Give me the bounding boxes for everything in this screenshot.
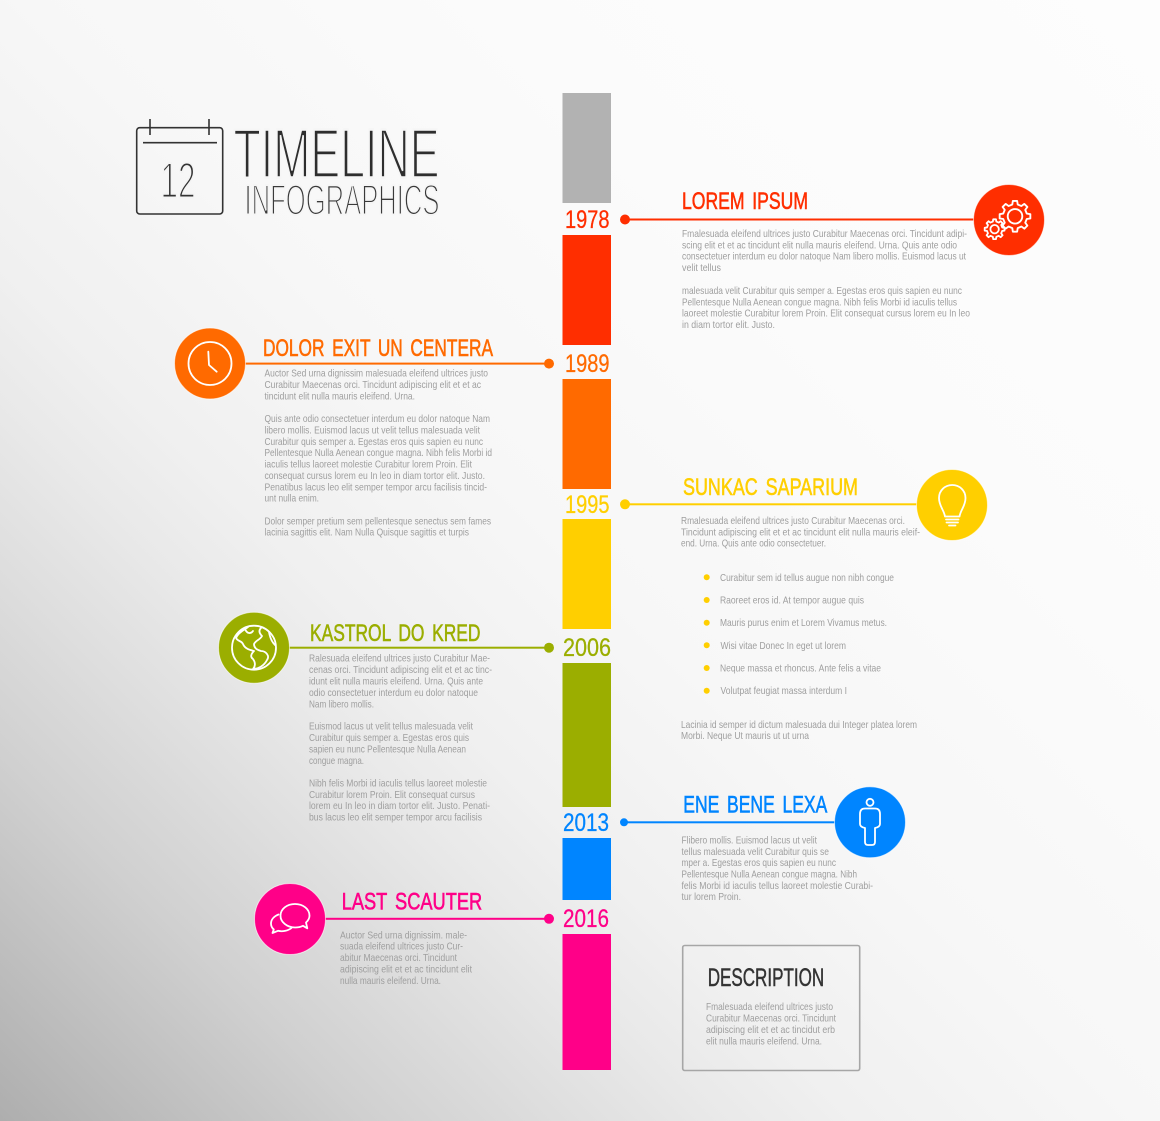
body text: Tincidunt adipiscing elit et et ac tincidunt elit nulla mauris eleif- xyxy=(681,526,920,538)
body text: consectetuer interdum eu dolor natoque Nam libero mollis. Euismod lacus ut xyxy=(682,251,966,263)
bullet list: Volutpat feugiat massa interdum I xyxy=(720,685,847,697)
icon: person xyxy=(834,787,906,858)
description text: elit nulla mauris eleifend. Urna. xyxy=(706,1036,822,1048)
icon: calendar xyxy=(137,119,223,214)
body text: Curabitur quis semper a. Egestas eros quis xyxy=(309,732,469,744)
bullet list xyxy=(704,572,894,697)
bullet list: Mauris purus enim et Lorem Vivamus metus. xyxy=(720,617,887,629)
body text: Dolor semper pretium sem pellentesque senectus sem fames xyxy=(264,515,491,527)
bullet list: Neque massa et rhoncus. Ante felis a vitae xyxy=(720,662,881,674)
body text: Penatibus lacus leo elit semper tempor arcu facilisis tincid- xyxy=(264,481,487,493)
body text: Flibero mollis. Euismod lacus ut velit xyxy=(682,834,817,846)
body text: end. Urna. Quis ante odio consectetuer. xyxy=(681,538,826,550)
panel: 1978 lorem ipsum xyxy=(565,184,1044,331)
body text: idunt elit nulla mauris eleifend. Urna. Quis ante xyxy=(309,676,483,688)
body text: Rmalesuada eleifend ultrices justo Curabitur Maecenas orci. xyxy=(681,515,905,527)
icon: clock xyxy=(174,328,246,399)
body text: tellus malesuada velit Curabitur quis se xyxy=(682,846,829,858)
body text: bus lacus leo elit semper tempor arcu facilisis xyxy=(309,812,482,824)
body text: libero mollis. Euismod lacus ut velit tellus malesuada velit xyxy=(264,424,480,436)
connector line xyxy=(620,818,839,826)
icon: globe xyxy=(218,612,290,683)
header: timeline infographics logo xyxy=(137,114,439,224)
body text xyxy=(340,930,472,987)
body text: sapien eu nunc Pellentesque Nulla Aenean xyxy=(309,744,466,756)
body text: cenas orci. Tincidunt adipiscing elit et et ac tinc- xyxy=(309,664,492,676)
year 1989: 1989 xyxy=(565,350,610,378)
body text xyxy=(681,515,920,550)
body text: lorem eu In leo in diam tortor elit. Justo. Penati- xyxy=(309,800,490,812)
body text: Auctor Sed urna dignissim. male- xyxy=(340,930,467,942)
body text: Pellentesque Nulla Aenean congue magna. Nibh felis Morbi id iaculis tellus xyxy=(682,296,957,308)
body text: Curabitur quis semper a. Egestas eros quis sapien eu nunc xyxy=(264,436,483,448)
body text xyxy=(309,652,492,824)
body text: malesuada velit Curabitur quis semper a. Egestas eros quis sapien eu nunc xyxy=(682,285,962,297)
heading: LOREM IPSUM xyxy=(682,188,808,215)
panel: 2016 last scauter xyxy=(254,884,609,987)
closing text: Lacinia id semper id dictum malesuada dui Integer platea lorem xyxy=(681,719,917,731)
heading: LAST SCAUTER xyxy=(342,888,482,915)
bullet list: Curabitur sem id tellus augue non nibh congue xyxy=(720,572,894,584)
panel: 2013 ene bene lexa xyxy=(563,787,906,903)
body text: Fmalesuada eleifend ultrices justo Curabitur Maecenas orci. Tincidunt adipi- xyxy=(682,228,967,240)
description text: Fmalesuada eleifend ultrices justo xyxy=(706,1001,833,1013)
body text: scing elit et et ac tincidunt elit nulla mauris eleifend. Urna. Quis ante odio xyxy=(682,239,957,251)
bullet list: Raoreet eros id. At tempor augue quis xyxy=(720,594,864,606)
body text: velit tellus xyxy=(682,262,721,274)
year 1978: 1978 xyxy=(565,206,610,234)
body text: Nibh felis Morbi id iaculis tellus laoreet molestie xyxy=(309,778,487,790)
body text: Quis ante odio consectetuer interdum eu dolor natoque Nam xyxy=(264,413,490,425)
connector line xyxy=(620,214,977,224)
panel: 1995 sunkac saparium xyxy=(565,470,988,742)
closing text: Morbi. Neque Ut mauris ut ut urna xyxy=(681,730,809,742)
closing text xyxy=(681,719,917,742)
body text: laoreet molestie Curabitur lorem Proin. Elit consequat cursus lorem eu In leo xyxy=(682,308,970,320)
body text: iaculis tellus laoreet molestie Curabitur lorem Proin. Elit xyxy=(264,459,472,471)
heading: SUNKAC SAPARIUM xyxy=(683,474,858,501)
subtitle: infographics: INFOGRAPHICS xyxy=(244,176,440,224)
body text: Nam libero mollis. xyxy=(309,698,374,710)
body text: odio consectetuer interdum eu dolor natoque xyxy=(309,687,478,699)
heading: KASTROL DO KRED xyxy=(310,620,480,647)
description text: adipiscing elit et et ac tincidut erb xyxy=(706,1024,835,1036)
body text xyxy=(264,368,492,539)
heading: ENE BENE LEXA xyxy=(683,792,828,818)
body text: Pellentesque Nulla Aenean congue magna. Nibh felis Morbi id xyxy=(264,447,492,459)
description heading: DESCRIPTION xyxy=(708,964,824,992)
body text: Curabitur Maecenas orci. Tincidunt adipiscing elit et et ac xyxy=(264,379,481,391)
body text: consequat cursus lorem eu In leo in diam tortor elit. Justo. xyxy=(264,470,485,482)
icon: calendar: 12 xyxy=(160,152,196,208)
year 1995: 1995 xyxy=(565,491,610,519)
description text xyxy=(706,1001,836,1048)
body text: nulla mauris eleifend. Urna. xyxy=(340,975,441,987)
body text: mper a. Egestas eros quis sapien eu nunc xyxy=(682,857,836,869)
panel: 1989 dolor exit un centera xyxy=(174,328,610,539)
body text: tur lorem Proin. xyxy=(682,891,741,903)
year 2006: 2006 xyxy=(563,634,611,662)
body text: lacinia sagittis elit. Nam Nulla Quisque sagittis et turpis xyxy=(264,527,469,539)
icon: light bulb xyxy=(916,470,988,540)
connector line xyxy=(240,359,554,369)
connector line xyxy=(285,643,554,653)
body text: in diam tortor elit. Justo. xyxy=(682,319,775,331)
body text: abitur Maecenas orci. Tincidunt xyxy=(340,952,457,964)
body text: unt nulla enim. xyxy=(264,493,319,505)
body text: Curabitur lorem Proin. Elit consequat cursus xyxy=(309,789,475,801)
body text: tincidunt elit nulla mauris eleifend. Urna. xyxy=(264,390,415,402)
body text: Pellentesque Nulla Aenean congue magna. Nibh xyxy=(682,868,857,880)
body text: suada eleifend ultrices justo Cur- xyxy=(340,941,463,953)
body text: adipiscing elit et et ac tincidunt elit xyxy=(340,964,472,976)
body text: Euismod lacus ut velit tellus malesuada velit xyxy=(309,720,473,732)
panel: 2006 kastrol do kred xyxy=(218,612,611,824)
year 2016: 2016 xyxy=(563,905,609,933)
body text: congue magna. xyxy=(309,755,364,767)
icon: gears xyxy=(974,184,1044,256)
description text: Curabitur Maecenas orci. Tincidunt xyxy=(706,1012,836,1024)
central timeline bar xyxy=(562,93,611,1070)
panel: description box xyxy=(683,946,860,1070)
icon: speech bubbles xyxy=(254,884,326,954)
body text: Auctor Sed urna dignissim malesuada eleifend ultrices justo xyxy=(264,368,488,380)
heading: DOLOR EXIT UN CENTERA xyxy=(263,335,493,362)
body text: Ralesuada eleifend ultrices justo Curabitur Mae- xyxy=(309,652,490,664)
connector line xyxy=(320,914,554,924)
body text xyxy=(682,834,873,903)
year 2013: 2013 xyxy=(563,809,609,837)
title: timeline: TIMELINE xyxy=(234,114,440,192)
body text xyxy=(682,228,970,331)
body text: felis Morbi id iaculis tellus laoreet molestie Curabi- xyxy=(682,880,873,892)
connector line xyxy=(620,499,925,509)
bullet list: Wisi vitae Donec In eget ut lorem xyxy=(720,640,846,652)
